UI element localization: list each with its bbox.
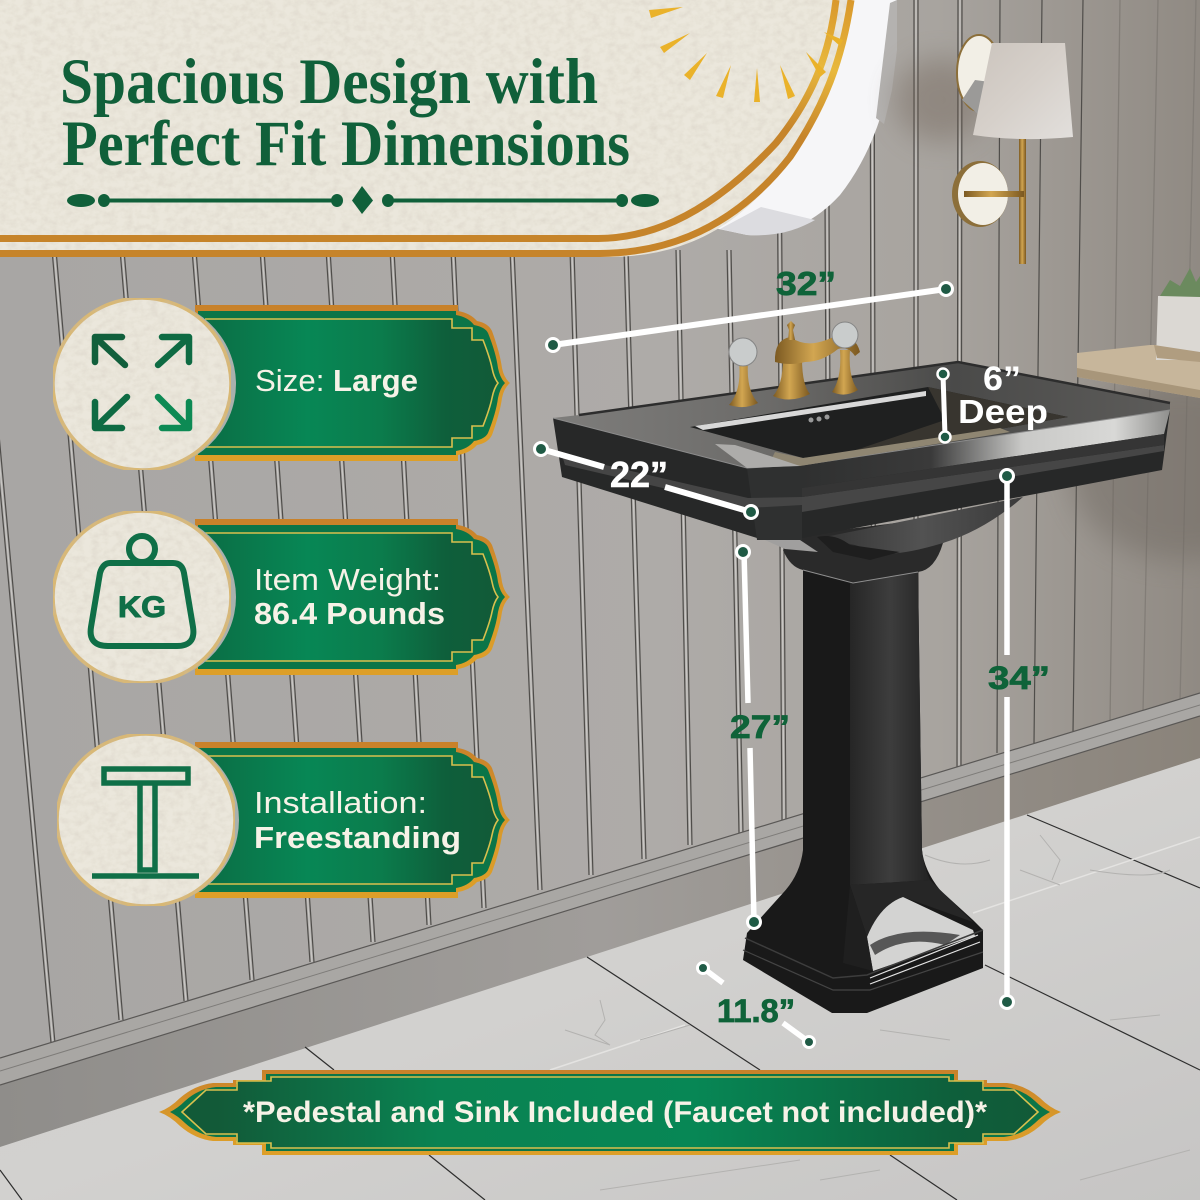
dimension: 34 inch height: 34” xyxy=(988,660,1050,696)
faucet xyxy=(729,321,860,407)
label: weight xyxy=(254,562,445,631)
dimension: 22 inch depth xyxy=(534,442,758,518)
banner: included note xyxy=(159,1070,1061,1155)
wall sconce lamp xyxy=(895,35,1073,264)
dimension: 22 inch depth: 22” xyxy=(610,454,668,495)
panel: item weight xyxy=(53,511,510,683)
banner: included note: *Pedestal and Sink Included (Faucet not included)* xyxy=(243,1096,987,1129)
title: Spacious Design with xyxy=(60,46,598,118)
icon: kilogram weight: KG xyxy=(118,591,166,624)
title xyxy=(60,46,630,180)
dimension: 6 inch deep: Deep xyxy=(958,393,1048,430)
dimension: 32 inch width: 32” xyxy=(776,265,836,302)
sun rays xyxy=(649,7,843,102)
label: weight: Item Weight: xyxy=(254,562,441,597)
label: installation: Installation: xyxy=(254,785,427,820)
dimension: 6 inch deep: 6” xyxy=(983,360,1021,398)
ribbon: installation xyxy=(195,742,510,898)
dimension: 32 inch width xyxy=(546,265,952,352)
dimension: 27 inch pedestal height: 27” xyxy=(730,709,790,745)
sink bowl and collar xyxy=(765,497,1023,583)
icon: expand arrows xyxy=(95,337,189,428)
panel: size xyxy=(53,298,510,470)
mirror xyxy=(700,0,897,235)
header paper banner xyxy=(0,0,851,257)
dimension: 11.8 inch base: 11.8” xyxy=(717,993,795,1029)
pedestal column xyxy=(743,570,983,1013)
dimension: 27 inch pedestal height xyxy=(730,546,790,928)
label: installation xyxy=(254,785,461,855)
shadow under shelf xyxy=(1070,380,1200,560)
icon: kilogram weight xyxy=(91,536,193,646)
shelf with plant xyxy=(1077,268,1200,398)
ribbon: size xyxy=(195,305,510,461)
ribbon: weight xyxy=(195,519,510,675)
panel: installation xyxy=(57,734,510,906)
title: Perfect Fit Dimensions xyxy=(62,108,630,180)
badge: weight xyxy=(53,511,236,683)
sink basin xyxy=(553,362,1170,540)
dimension: 34 inch height xyxy=(988,470,1050,1008)
floor xyxy=(0,758,1200,1200)
label: size: Size: Large xyxy=(255,363,418,398)
baseboard xyxy=(0,693,1200,1149)
dimension: 6 inch deep xyxy=(938,360,1048,442)
label: installation: Freestanding xyxy=(254,820,461,855)
dimension: 11.8 inch base xyxy=(698,962,814,1048)
badge: size xyxy=(53,298,236,470)
ornament divider xyxy=(67,186,659,214)
badge: installation xyxy=(57,734,239,906)
label: weight: 86.4 Pounds xyxy=(254,596,445,631)
icon: pedestal xyxy=(92,769,199,876)
